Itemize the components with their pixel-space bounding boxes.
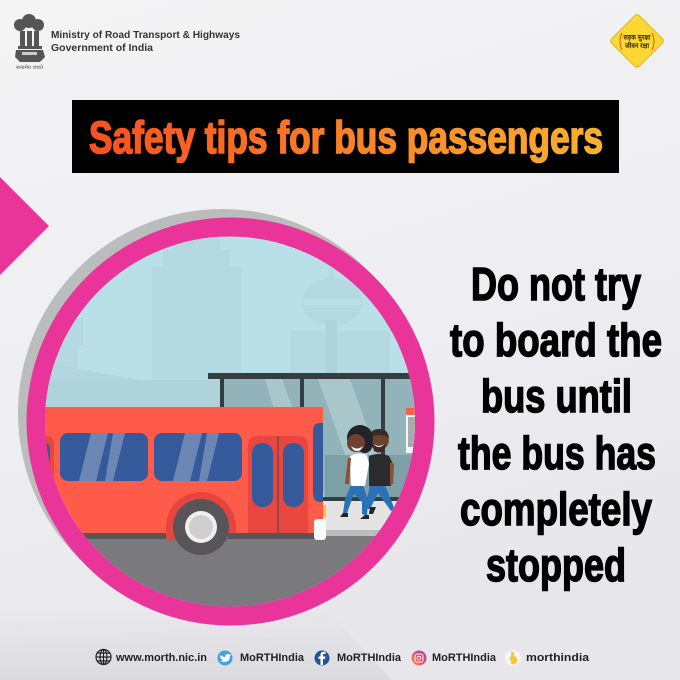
icon: facebook <box>314 650 330 666</box>
icon: twitter <box>218 650 232 666</box>
footer: social links: MoRTHIndia <box>432 652 497 664</box>
title banner <box>72 100 619 173</box>
bus stop scene <box>45 236 415 606</box>
road safety diamond logo: सड़क सुरक्षा <box>623 34 652 42</box>
bus doors <box>248 436 308 533</box>
red bus <box>30 407 326 555</box>
road safety diamond logo: जीवन रक्षा <box>624 41 650 50</box>
bus shelter <box>208 373 420 501</box>
header: ministry name: Government of India <box>51 42 153 54</box>
grey offset ring <box>18 209 426 617</box>
pink ring <box>26 218 434 626</box>
footer: social links: MoRTHIndia <box>337 652 402 664</box>
icon: instagram <box>412 650 426 666</box>
header: ministry emblem <box>14 14 45 71</box>
main safety message <box>450 258 662 591</box>
man <box>367 486 394 511</box>
header: ministry emblem: सत्यमेव जयते <box>16 64 43 71</box>
pink triangle accent <box>0 177 49 275</box>
footer: social links: morthindia <box>526 652 590 664</box>
road safety diamond logo <box>609 13 665 69</box>
icon: koo <box>505 650 521 666</box>
pavement and road <box>63 501 397 530</box>
footer: social links: MoRTHIndia <box>240 652 305 664</box>
footer: social links <box>96 650 590 666</box>
couple walking <box>340 425 395 519</box>
timetable sign <box>406 408 415 453</box>
circular illustration <box>18 209 434 626</box>
woman <box>347 425 373 453</box>
city skyline <box>46 236 337 400</box>
bus windows <box>60 433 148 481</box>
header: ministry name: Ministry of Road Transport & Highways <box>51 29 240 41</box>
headlight <box>323 505 326 517</box>
footer: social links: www.morth.nic.in <box>115 652 207 664</box>
main safety message: stopped <box>486 539 626 591</box>
icon: globe <box>96 650 111 664</box>
wheel <box>166 492 236 540</box>
main safety message: bus until <box>481 370 632 422</box>
header: ministry name <box>51 29 240 54</box>
